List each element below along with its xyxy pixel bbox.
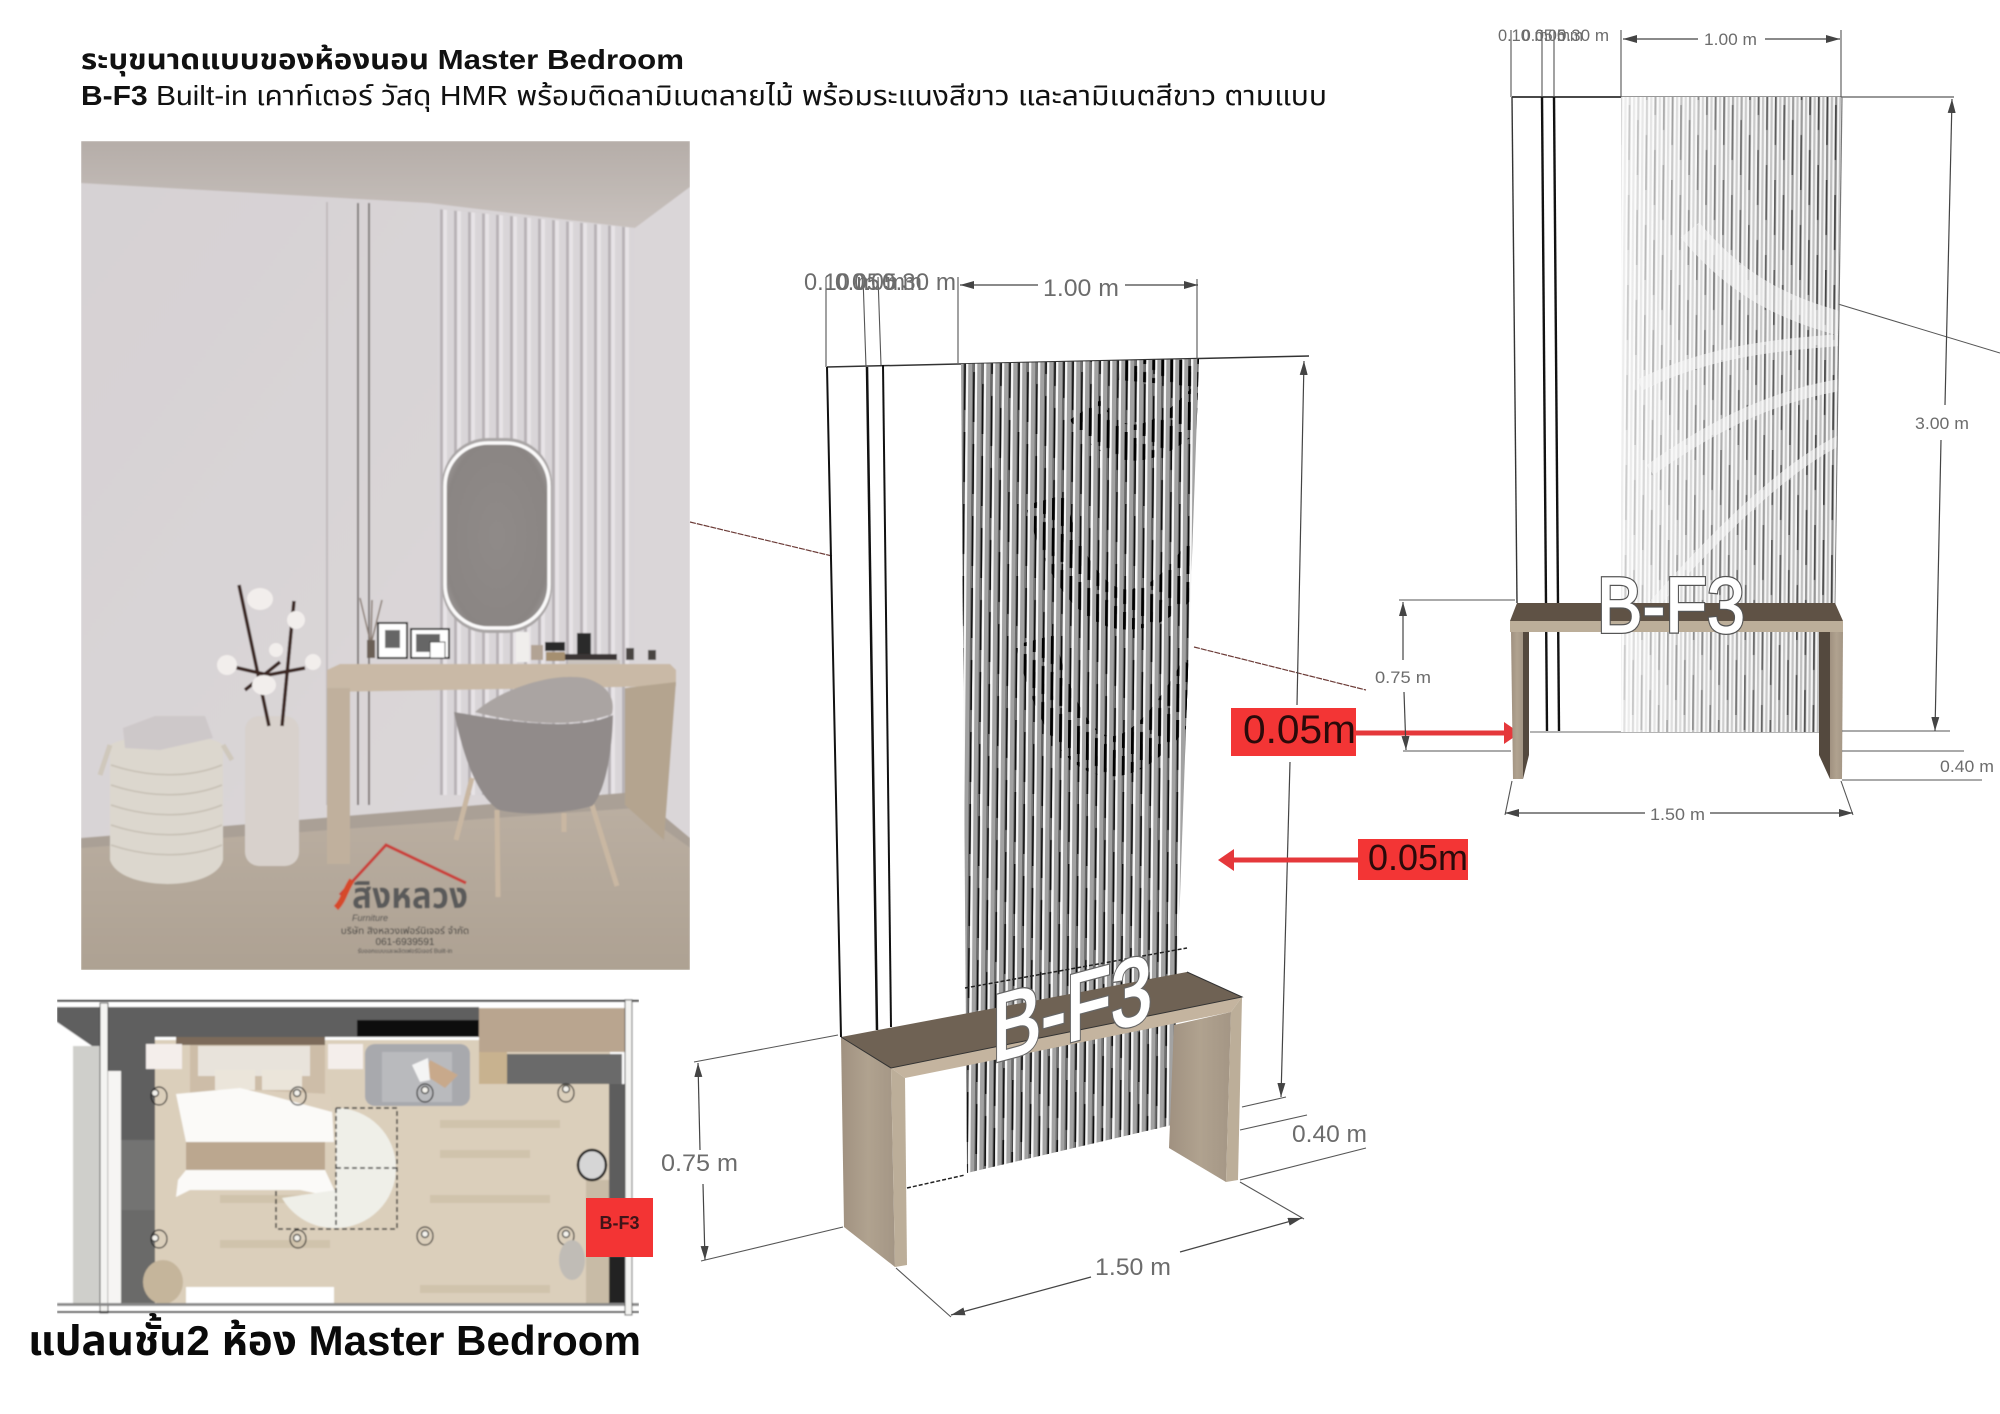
dimension lines — [1403, 39, 1952, 813]
panel: interior render photo — [81, 141, 690, 970]
plant — [143, 1260, 183, 1304]
slats — [961, 359, 1199, 1173]
slats — [1621, 97, 1841, 732]
dimension labels: 0.40 m — [1292, 1121, 1367, 1148]
dimension labels: 0.75 m — [661, 1150, 738, 1177]
company logo: 061-6939591 — [376, 937, 435, 948]
dimension labels: 0.05 m — [852, 269, 922, 296]
bottom console — [186, 1287, 334, 1304]
B-F3 label elevation: B-F3 — [1597, 561, 1745, 649]
company logo: รับออกแบบและผลิตเฟอร์นิเจอร์ Built-in — [358, 948, 452, 955]
wall outline — [690, 356, 1366, 1037]
baseboard — [81, 792, 690, 848]
ceiling — [81, 141, 690, 228]
callout: 0.05m left arrow — [1218, 837, 1468, 880]
B-F3 label elevation: B-F3 — [1597, 561, 1745, 649]
callout: 0.05m right arrow — [1231, 708, 1520, 756]
panel: front elevation drawing — [1512, 90, 2000, 740]
callout: 0.05m right arrow: 0.05m — [1243, 708, 1356, 752]
dimension labels: 1.00 m — [1704, 30, 1757, 49]
TV cabinet and wardrobe — [479, 1008, 627, 1052]
company logo: Furniture — [352, 913, 388, 923]
dimension labels: 1.50 m — [1650, 805, 1705, 824]
ceiling lights — [151, 1084, 574, 1248]
dimension lines — [698, 285, 1304, 1315]
console table perspective — [841, 972, 1242, 1267]
dimension labels: 0.05 m — [1535, 26, 1583, 45]
dimension labels: 0.10 m — [1498, 26, 1548, 45]
dimension labels — [1375, 26, 1994, 824]
callout: B-F3 plan tag — [586, 1198, 653, 1257]
company logo — [336, 845, 469, 955]
B-F3 label perspective: B-F3 — [992, 935, 1152, 1083]
dimension labels: 0.10 m — [804, 269, 876, 296]
cotton branches — [217, 585, 321, 726]
dimension labels — [661, 269, 1367, 1281]
wall panel lines — [327, 202, 369, 805]
mirror — [442, 438, 552, 633]
dimension labels: 0.05 m — [1522, 26, 1570, 45]
wall outline — [1512, 97, 2000, 732]
panel: floor plan — [57, 1000, 639, 1318]
extension lines — [694, 277, 1366, 1317]
console table elevation — [1510, 603, 1843, 779]
company logo: บริษัท สิงหลวงเฟอร์นิเจอร์ จำกัด — [341, 925, 469, 937]
basket — [100, 716, 232, 884]
walls and strips — [57, 1000, 639, 1002]
plan caption: แปลนชั้น2 ห้อง Master Bedroom — [28, 1313, 641, 1364]
bed — [146, 1037, 363, 1198]
right wall — [635, 187, 690, 848]
vase — [245, 716, 299, 866]
dimension labels: 0.05 m — [835, 269, 905, 296]
dimension labels: 0.30 m — [1557, 26, 1609, 45]
title — [81, 44, 1327, 112]
company logo: สิงหลวง — [352, 875, 468, 916]
panel: perspective drawing — [690, 350, 1366, 1190]
dimensions: perspective drawing — [661, 269, 1367, 1317]
callout: B-F3 plan tag: B-F3 — [600, 1213, 640, 1233]
sofa — [365, 1044, 470, 1106]
desk decor — [360, 598, 656, 664]
dimension labels: 1.50 m — [1095, 1254, 1171, 1281]
bottom wall lines — [57, 1303, 639, 1306]
dimension labels: 0.75 m — [1375, 668, 1431, 687]
dimension labels: 1.00 m — [1043, 275, 1119, 302]
dimension labels: 3.00 m — [1915, 414, 1969, 433]
wall slats — [437, 209, 635, 795]
floor — [81, 806, 690, 970]
callout: 0.05m left arrow: 0.05m — [1368, 837, 1468, 878]
dimension labels: 0.40 m — [1940, 757, 1994, 776]
extension lines — [1399, 30, 1982, 815]
floor — [150, 1040, 610, 1304]
chair — [454, 677, 617, 897]
desk — [327, 664, 676, 864]
dimension labels: 0.30 m — [882, 269, 956, 296]
side chair and plant — [559, 1150, 606, 1280]
B-F3 label perspective: B-F3 — [992, 935, 1152, 1083]
rug — [276, 1108, 397, 1229]
dimensions: front elevation — [1375, 26, 1994, 824]
subtitle: B-F3 Built-in เคาท์เตอร์ วัสดุ HMR พร้อมติดลามิเนตลายไม้ พร้อมระแนงสีขาว และลามิเนตสีขาว ตามแบบ — [81, 80, 1327, 112]
title: ระบุขนาดแบบของห้องนอน Master Bedroom — [81, 44, 684, 76]
